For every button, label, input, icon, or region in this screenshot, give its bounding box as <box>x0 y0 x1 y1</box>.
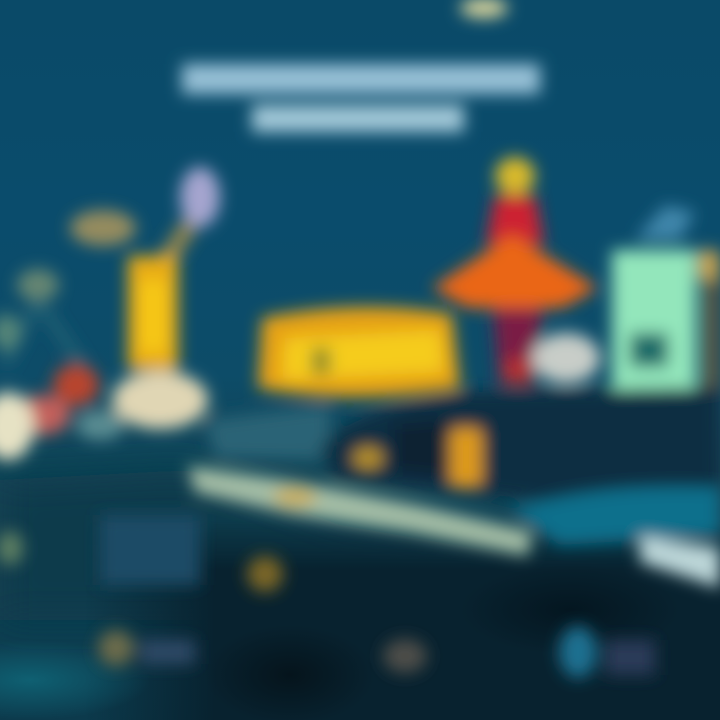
mint green building <box>612 205 696 390</box>
car headlight <box>640 536 720 588</box>
dashboard panels <box>0 515 655 678</box>
left distant tower <box>0 269 82 365</box>
car windshield reflections <box>353 428 482 486</box>
central yellow building <box>258 307 460 397</box>
car roof and hood <box>320 388 720 545</box>
left street lamp <box>70 167 220 370</box>
top emblem <box>460 0 508 18</box>
right edge building <box>698 250 720 405</box>
car hood highlight strip <box>188 466 532 556</box>
street band <box>205 405 330 460</box>
title <box>182 64 540 132</box>
red and orange tower <box>432 157 600 384</box>
dark lower area <box>0 470 720 720</box>
left street objects <box>0 364 208 460</box>
